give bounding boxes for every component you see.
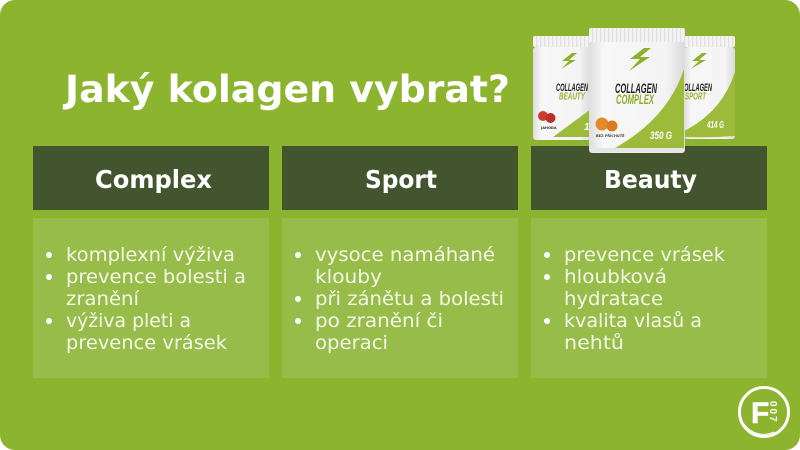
header: beauty: Beauty <box>604 165 697 194</box>
panel: beauty <box>531 146 767 378</box>
list: sport: vysoce namáhané <box>315 244 495 266</box>
list: complex: zranění <box>66 288 140 310</box>
header: sport <box>282 146 518 210</box>
jar: collagen beauty: BEAUTY <box>559 92 586 102</box>
jar: collagen sport: SPORT <box>685 92 707 102</box>
title: Jaký kolagen vybrat? <box>62 68 510 111</box>
jar: collagen sport: 414 G <box>706 120 724 131</box>
jar: collagen sport <box>684 36 735 139</box>
list: complex <box>33 218 269 378</box>
list: complex: komplexní výživa <box>66 244 235 266</box>
header: sport: Sport <box>365 165 437 194</box>
header: beauty <box>531 146 767 210</box>
list: complex: výživa pleti a <box>66 310 191 332</box>
list: complex: prevence vrásek <box>66 332 227 354</box>
jar: collagen complex: COLLAGEN <box>615 80 657 96</box>
list: beauty <box>531 218 767 378</box>
header: complex <box>33 146 269 210</box>
header: complex: Complex <box>95 165 212 194</box>
logo: F007: 007 <box>767 401 778 424</box>
jar: collagen complex: BEZ PŘÍCHUTĚ <box>596 133 625 138</box>
list: sport: při zánětu a bolesti <box>315 288 504 310</box>
jar: collagen sport: OLLAGEN <box>684 82 713 94</box>
list: beauty: prevence vrásek <box>564 244 725 266</box>
jar: collagen beauty: 1 <box>584 122 590 133</box>
logo: F007 <box>740 388 788 436</box>
list: sport: po zranění či <box>315 310 443 332</box>
list: sport: operaci <box>315 332 388 354</box>
list: complex: prevence bolesti a <box>66 266 246 288</box>
list: beauty: hydratace <box>564 288 663 310</box>
jar: collagen complex: COMPLEX <box>616 92 655 107</box>
product jars <box>533 28 735 153</box>
jar: collagen beauty <box>533 36 591 140</box>
jar: collagen beauty: COLLAGEN <box>556 82 589 94</box>
jar: collagen complex: 350 G <box>650 130 672 142</box>
list: sport: klouby <box>315 266 382 288</box>
jar: collagen complex <box>589 28 685 153</box>
list: beauty: kvalita vlasů a <box>564 310 702 332</box>
list: beauty: nehtů <box>564 332 624 354</box>
logo: F007: F <box>751 397 769 430</box>
list: beauty: hloubková <box>564 266 667 288</box>
panel: sport <box>282 146 518 378</box>
jar: collagen beauty: JAHODA <box>540 126 557 130</box>
panel: complex <box>33 146 269 378</box>
list: sport <box>282 218 518 378</box>
